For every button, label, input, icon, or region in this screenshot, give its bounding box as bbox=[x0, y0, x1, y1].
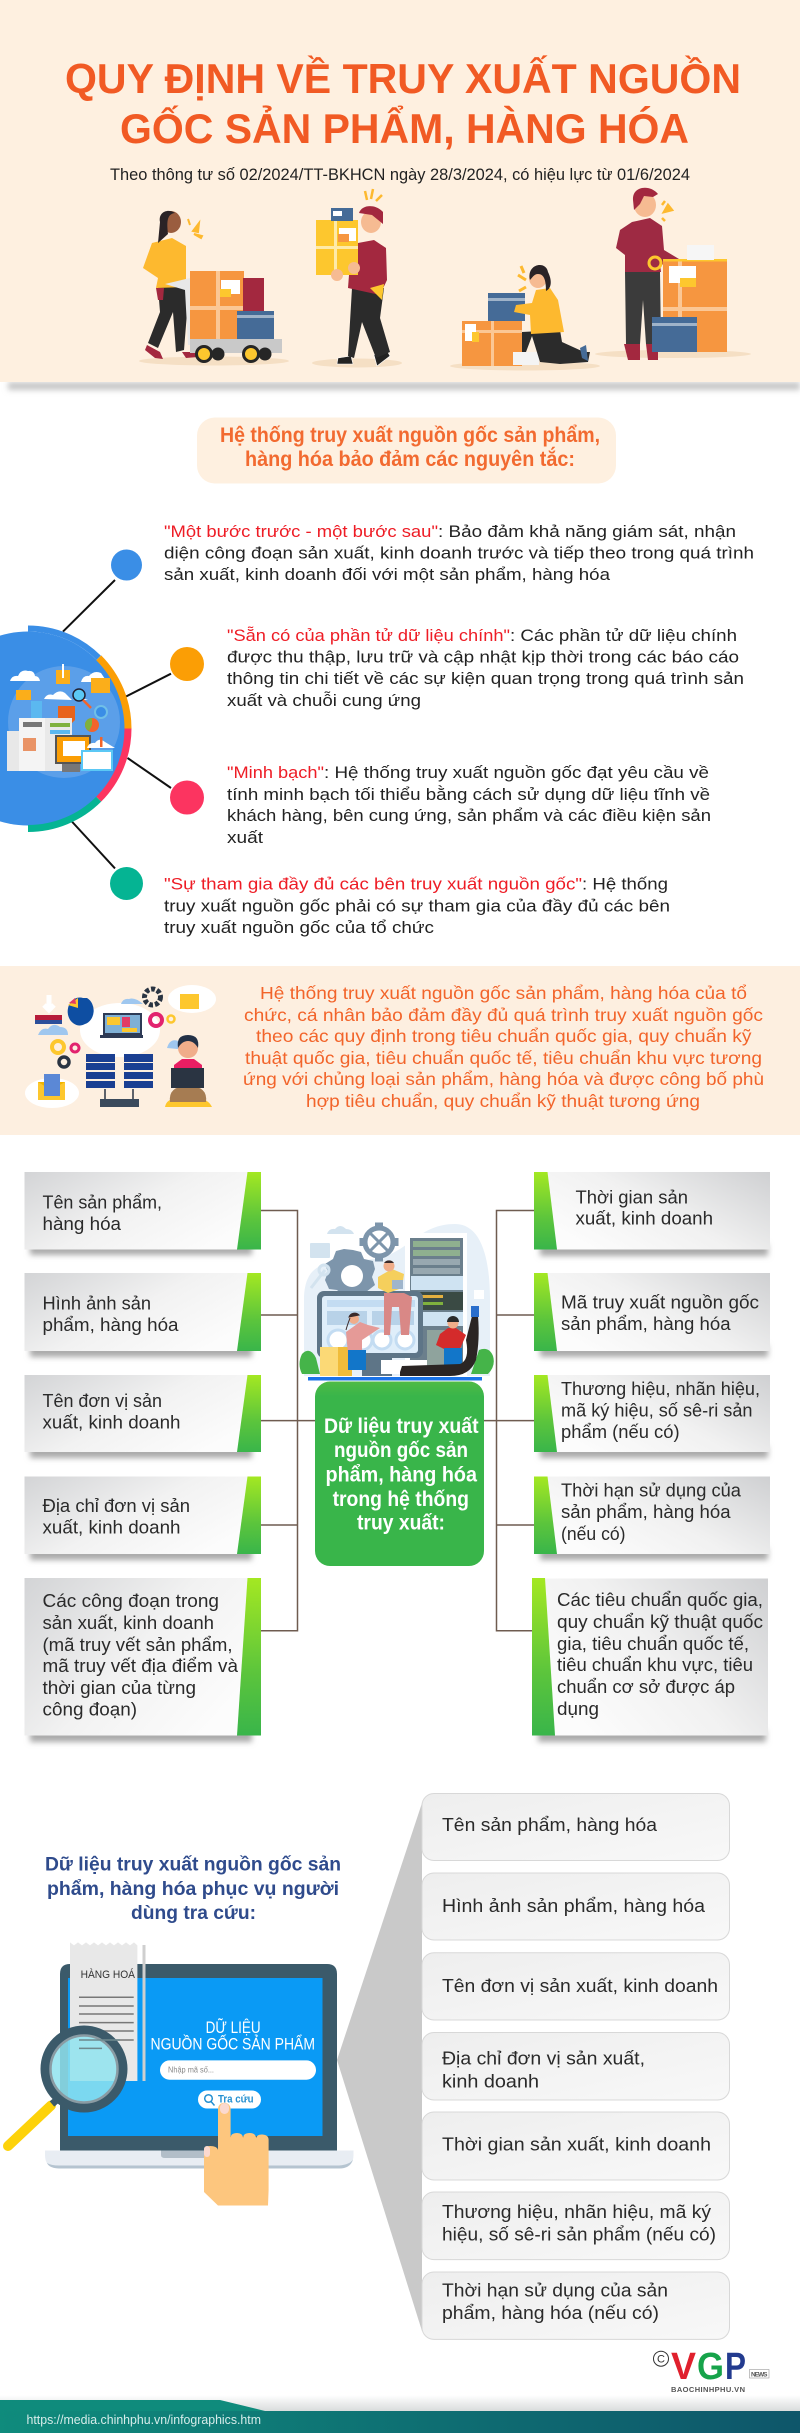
subtitle: Theo thông tư số 02/2024/TT-BKHCN ngày 28/3/2024, có hiệu lực từ 01/6/2024 bbox=[110, 165, 690, 184]
text block: principle 3: tính minh bạch tối thiểu bằng cách sử dụng dữ liệu tĩnh về bbox=[227, 785, 710, 804]
card: production stages: mã truy vết địa điểm và bbox=[42, 1656, 239, 1676]
card: production time: Thời gian sản bbox=[576, 1188, 688, 1208]
text: responsibility statement bbox=[243, 983, 764, 1111]
heading pill: principles: hàng hóa bảo đảm các nguyên tắc: bbox=[245, 447, 575, 471]
card: production stages: sản xuất, kinh doanh bbox=[42, 1613, 214, 1633]
text: responsibility statement: Hệ thống truy xuất nguồn gốc sản phẩm, hàng hóa của tổ bbox=[260, 983, 747, 1003]
card: product name bbox=[24, 1172, 261, 1255]
card: product name: hàng hóa bbox=[42, 1214, 122, 1234]
marker: orange bbox=[170, 647, 204, 681]
card: lookup producer address bbox=[422, 2032, 730, 2100]
logo: VGP: G bbox=[697, 2346, 724, 2388]
panel: organisation responsibility bbox=[0, 966, 800, 1135]
card: lookup expiry bbox=[422, 2272, 730, 2339]
text: responsibility statement: theo các quy định trong tiêu chuẩn quốc gia, quy chuẩn kỹ bbox=[256, 1026, 752, 1046]
text block: principle 1: sản xuất, kinh doanh đối với một sản phẩm, hàng hóa bbox=[164, 565, 611, 584]
title: QUY ĐỊNH VỀ TRUY XUẤT NGUỒN bbox=[65, 54, 741, 102]
card: standards: chuẩn cơ sở được áp bbox=[557, 1677, 735, 1697]
card: standards: Các tiêu chuẩn quốc gia, bbox=[557, 1590, 763, 1610]
card: product image: phẩm, hàng hóa bbox=[42, 1315, 180, 1335]
card: producer name: Tên đơn vị sản bbox=[42, 1391, 162, 1411]
footer bar bbox=[0, 2395, 800, 2433]
card: expiry: sản phẩm, hàng hóa bbox=[561, 1502, 732, 1522]
card: brand and serial: Thương hiệu, nhãn hiệu, bbox=[561, 1379, 760, 1399]
text block: principle 2: xuất và chuỗi cung ứng bbox=[227, 691, 421, 710]
text block: principle 4: truy xuất nguồn gốc phải có sự tham gia của đầy đủ các bên bbox=[164, 896, 670, 916]
logo: VGP: BAOCHINHPHU.VN bbox=[671, 2385, 745, 2394]
marker: pink bbox=[170, 780, 204, 814]
text: responsibility statement: thuật quốc gia, tiêu chuẩn quốc tế, tiêu chuẩn khu vực tương bbox=[245, 1048, 762, 1068]
icon: magnifier bbox=[8, 2030, 123, 2146]
text block: principle 4: "Sự tham gia đầy đủ các bên truy xuất nguồn gốc" bbox=[164, 874, 582, 894]
illustration: server and laptop user bbox=[25, 985, 216, 1108]
panel: data centre label bbox=[315, 1382, 484, 1566]
card: producer address: xuất, kinh doanh bbox=[42, 1518, 180, 1538]
illustration: data system bbox=[7, 664, 120, 778]
illustration: woman pushing trolley bbox=[139, 211, 289, 366]
card: production stages: thời gian của từng bbox=[42, 1678, 196, 1698]
card: lookup brand: hiệu, số sê-ri sản phẩm (nếu có) bbox=[442, 2225, 716, 2245]
diagram: central circle with connectors bbox=[0, 580, 171, 868]
heading: lookup data: Dữ liệu truy xuất nguồn gốc sản bbox=[45, 1855, 341, 1876]
pointer: grey wedge bbox=[337, 1803, 422, 2331]
text block: principle 4 bbox=[164, 874, 670, 937]
panel: data centre label: Dữ liệu truy xuất bbox=[324, 1415, 479, 1438]
heading: lookup data: dùng tra cứu: bbox=[131, 1903, 256, 1924]
text: responsibility statement: chức, cá nhân bảo đảm đầy đủ quá trình truy xuất nguồn gốc bbox=[244, 1005, 763, 1025]
card: lookup producer address: Địa chỉ đơn vị sản xuất, bbox=[442, 2049, 645, 2069]
illustration: kneeling woman with boxes bbox=[450, 265, 600, 370]
card: expiry: (nếu có) bbox=[561, 1524, 626, 1544]
card: product name: Tên sản phẩm, bbox=[42, 1192, 162, 1212]
text: responsibility statement: ứng với chủng loại sản phẩm, hàng hóa và được công bố phù bbox=[243, 1069, 764, 1089]
card: production stages: công đoạn) bbox=[42, 1700, 137, 1720]
card: producer address bbox=[24, 1476, 261, 1560]
icon: receipt: HÀNG HOÁ bbox=[81, 1968, 136, 1981]
card: producer address: Địa chỉ đơn vị sản bbox=[42, 1496, 190, 1516]
text block: principle 3: khách hàng, bên cung ứng, sản phẩm và các điều kiện sản bbox=[227, 806, 711, 825]
card: lookup product name bbox=[422, 1794, 730, 1860]
text block: principle 4: truy xuất nguồn gốc của tổ chức bbox=[164, 918, 435, 937]
card: expiry: Thời hạn sử dụng của bbox=[561, 1481, 742, 1501]
panel: data centre label: nguồn gốc sản bbox=[334, 1439, 468, 1462]
card: brand and serial bbox=[534, 1375, 770, 1458]
panel: data centre label: trong hệ thống bbox=[333, 1488, 469, 1511]
heading: lookup data: phẩm, hàng hóa phục vụ người bbox=[47, 1879, 339, 1900]
illustration: laptop lookup: Nhập mã số... bbox=[168, 2065, 214, 2074]
logo: VGP: P bbox=[725, 2346, 746, 2388]
card: production stages: Các công đoạn trong bbox=[42, 1591, 219, 1611]
card: standards: quy chuẩn kỹ thuật quốc bbox=[557, 1612, 763, 1632]
panel: data centre label: phẩm, hàng hóa bbox=[326, 1463, 477, 1486]
text block: principle 3 bbox=[227, 763, 711, 847]
card: lookup brand bbox=[422, 2192, 730, 2260]
illustration: laptop lookup bbox=[8, 1942, 354, 2206]
card: lookup expiry: phẩm, hàng hóa (nếu có) bbox=[442, 2303, 659, 2323]
marker: teal bbox=[110, 867, 143, 900]
card: traceability code: sản phẩm, hàng hóa bbox=[561, 1314, 732, 1334]
text block: principle 2: được thu thập, lưu trữ và cập nhật kịp thời trong các báo cáo bbox=[227, 648, 739, 666]
card: lookup expiry: Thời hạn sử dụng của sản bbox=[442, 2280, 668, 2300]
icon: receipt bbox=[70, 1942, 146, 2081]
text block: principle 2: thông tin chi tiết về các sự kiện quan trọng trong quá trình sản bbox=[227, 669, 744, 688]
card: lookup product image bbox=[422, 1873, 730, 1940]
card: standards bbox=[532, 1578, 768, 1742]
card: brand and serial: mã ký hiệu, số sê-ri sản bbox=[561, 1401, 752, 1421]
text block: principle 2: : Các phần tử dữ liệu chính bbox=[510, 626, 737, 645]
card: producer name: xuất, kinh doanh bbox=[42, 1413, 180, 1433]
illustration: laptop lookup: Tra cứu bbox=[218, 2094, 254, 2106]
text block: principle 1 bbox=[164, 522, 754, 584]
card: lookup producer name bbox=[422, 1953, 730, 2020]
text block: principle 1: diện công đoạn sản xuất, kinh doanh trước và tiếp theo trong quá trình bbox=[164, 544, 754, 563]
card: standards: dụng bbox=[557, 1699, 599, 1719]
text block: principle 3: : Hệ thống truy xuất nguồn gốc đạt yêu cầu về bbox=[324, 763, 709, 782]
card: standards: gia, tiêu chuẩn quốc tế, bbox=[557, 1634, 749, 1654]
illustration: laptop lookup: DỮ LIỆU bbox=[206, 2018, 261, 2037]
text block: principle 3: xuất bbox=[227, 828, 263, 847]
card: lookup product image: Hình ảnh sản phẩm, hàng hóa bbox=[442, 1896, 706, 1916]
card: traceability code: Mã truy xuất nguồn gốc bbox=[561, 1292, 759, 1312]
card: expiry bbox=[534, 1476, 770, 1560]
title: GỐC SẢN PHẨM, HÀNG HÓA bbox=[120, 104, 689, 152]
illustration: man carrying boxes bbox=[312, 189, 402, 368]
text block: principle 2 bbox=[227, 626, 744, 710]
text block: principle 2: "Sẵn có của phần tử dữ liệu chính" bbox=[227, 626, 510, 645]
card: production time bbox=[534, 1172, 770, 1256]
card: lookup production time bbox=[422, 2112, 730, 2180]
panel: data centre label: truy xuất: bbox=[357, 1512, 445, 1535]
card: lookup producer name: Tên đơn vị sản xuất, kinh doanh bbox=[442, 1976, 718, 1996]
text block: principle 4: : Hệ thống bbox=[582, 874, 668, 894]
card: product image bbox=[24, 1273, 261, 1357]
logo: VGP: C bbox=[657, 2354, 665, 2366]
card: lookup brand: Thương hiệu, nhãn hiệu, mã ký bbox=[442, 2202, 711, 2222]
card: lookup production time: Thời gian sản xuất, kinh doanh bbox=[442, 2134, 711, 2154]
card: brand and serial: phẩm (nếu có) bbox=[561, 1422, 680, 1442]
illustration: laptop lookup: NGUỒN GỐC SẢN PHẨM bbox=[150, 2034, 315, 2054]
logo: VGP: V bbox=[671, 2346, 697, 2388]
logo: VGP: NEWS bbox=[751, 2372, 768, 2378]
illustration: man taping box bbox=[595, 188, 751, 360]
text: responsibility statement: hợp tiêu chuẩn, quy chuẩn kỹ thuật tương ứng bbox=[306, 1091, 700, 1111]
title bbox=[65, 54, 741, 152]
heading: lookup data bbox=[45, 1855, 341, 1924]
text block: principle 1: : Bảo đảm khả năng giám sát, nhận bbox=[438, 522, 736, 541]
heading pill: principles: Hệ thống truy xuất nguồn gốc sản phẩm, bbox=[220, 424, 600, 447]
card: lookup product name: Tên sản phẩm, hàng hóa bbox=[442, 1815, 658, 1835]
illustration: data centre team bbox=[300, 1224, 494, 1380]
heading pill: principles bbox=[197, 418, 616, 484]
logo: VGP bbox=[654, 2346, 769, 2394]
card: traceability code bbox=[534, 1273, 770, 1357]
card: production stages: (mã truy vết sản phẩm, bbox=[42, 1635, 232, 1655]
marker: blue bbox=[111, 550, 142, 580]
card: production time: xuất, kinh doanh bbox=[576, 1209, 713, 1229]
card: producer name bbox=[24, 1375, 261, 1458]
text block: principle 3: "Minh bạch" bbox=[227, 763, 324, 782]
card: product image: Hình ảnh sản bbox=[42, 1294, 151, 1314]
card: lookup producer address: kinh doanh bbox=[442, 2072, 539, 2092]
card: standards: tiêu chuẩn khu vực, tiêu bbox=[557, 1655, 753, 1675]
card: production stages bbox=[24, 1578, 261, 1742]
icon: pointing hand bbox=[204, 2103, 269, 2206]
panel: header bbox=[0, 0, 800, 390]
text block: principle 1: "Một bước trước - một bước sau" bbox=[164, 522, 438, 541]
footer bar: https://media.chinhphu.vn/infographics.htm bbox=[26, 2412, 261, 2427]
diagram connectors bbox=[261, 1210, 534, 1631]
